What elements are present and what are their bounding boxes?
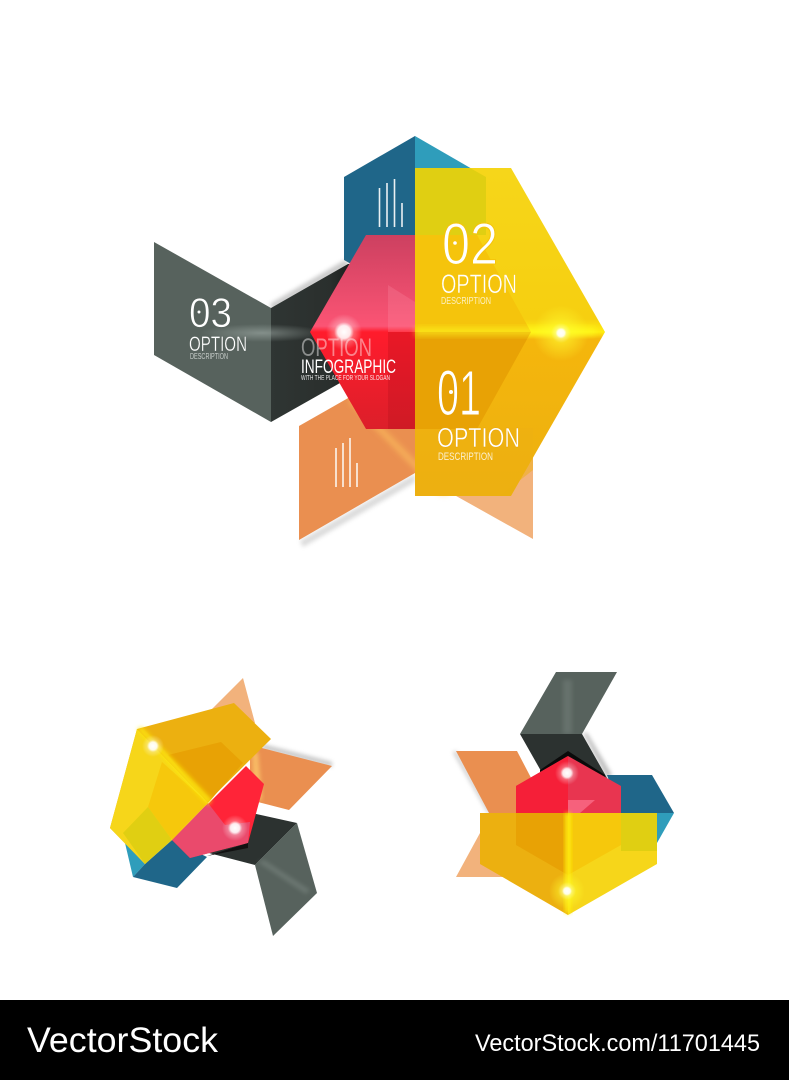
footer logo: VectorStock	[27, 1021, 219, 1060]
text: description 03: DESCRIPTION	[190, 352, 228, 361]
text: centre heading: OPTION	[301, 334, 372, 362]
footer band	[0, 1000, 789, 1080]
text: option 02: OPTION	[441, 269, 517, 299]
panel: yellow options	[415, 168, 605, 496]
icon: dot in zero 01	[449, 390, 453, 394]
orange shape	[453, 751, 540, 813]
icon: yellow flare	[533, 305, 589, 361]
red shape	[516, 756, 621, 813]
grey shape	[255, 823, 317, 936]
text: 02: 02	[442, 212, 498, 277]
bottom-right diagram	[453, 672, 674, 915]
blue shape	[125, 840, 207, 888]
main diagram	[154, 136, 605, 547]
panel: orange ribbon	[299, 360, 533, 547]
text: option 03: OPTION	[189, 333, 247, 356]
yellow shape	[110, 703, 271, 864]
text: 01: 01	[437, 357, 481, 429]
yellow shape	[480, 813, 657, 915]
dark shape	[520, 733, 612, 790]
icon: dot in zero 02	[453, 241, 457, 245]
text: description 02: DESCRIPTION	[441, 296, 491, 307]
text: centre heading	[301, 334, 396, 382]
dark shape	[205, 813, 297, 865]
panel: option 03 dark fold	[154, 242, 370, 422]
panel: blue hexagon	[344, 136, 486, 300]
icon: bars bottom	[336, 438, 357, 487]
red shape	[172, 766, 264, 858]
text: centre heading: WITH THE PLACE FOR YOUR SLOGAN	[301, 375, 390, 382]
panel: red hexagon	[310, 235, 415, 429]
icon: bars top	[380, 179, 402, 227]
orange shape	[250, 744, 332, 810]
flare line	[415, 327, 595, 336]
peach shape	[211, 678, 255, 730]
bottom-left diagram	[110, 678, 332, 936]
icon: dot in zero 03	[198, 310, 200, 314]
text: 03: 03	[189, 289, 232, 336]
icon: red flare	[326, 314, 362, 350]
footer url: VectorStock.com/11701445	[475, 1030, 760, 1057]
text: description 01: DESCRIPTION	[438, 451, 493, 463]
peach shape	[456, 833, 503, 877]
icon: red flare	[222, 815, 248, 841]
text: option 01: OPTION	[437, 422, 520, 453]
grey shape	[520, 672, 617, 734]
blue shape	[607, 775, 674, 843]
text: centre heading: INFOGRAPHIC	[301, 356, 396, 378]
